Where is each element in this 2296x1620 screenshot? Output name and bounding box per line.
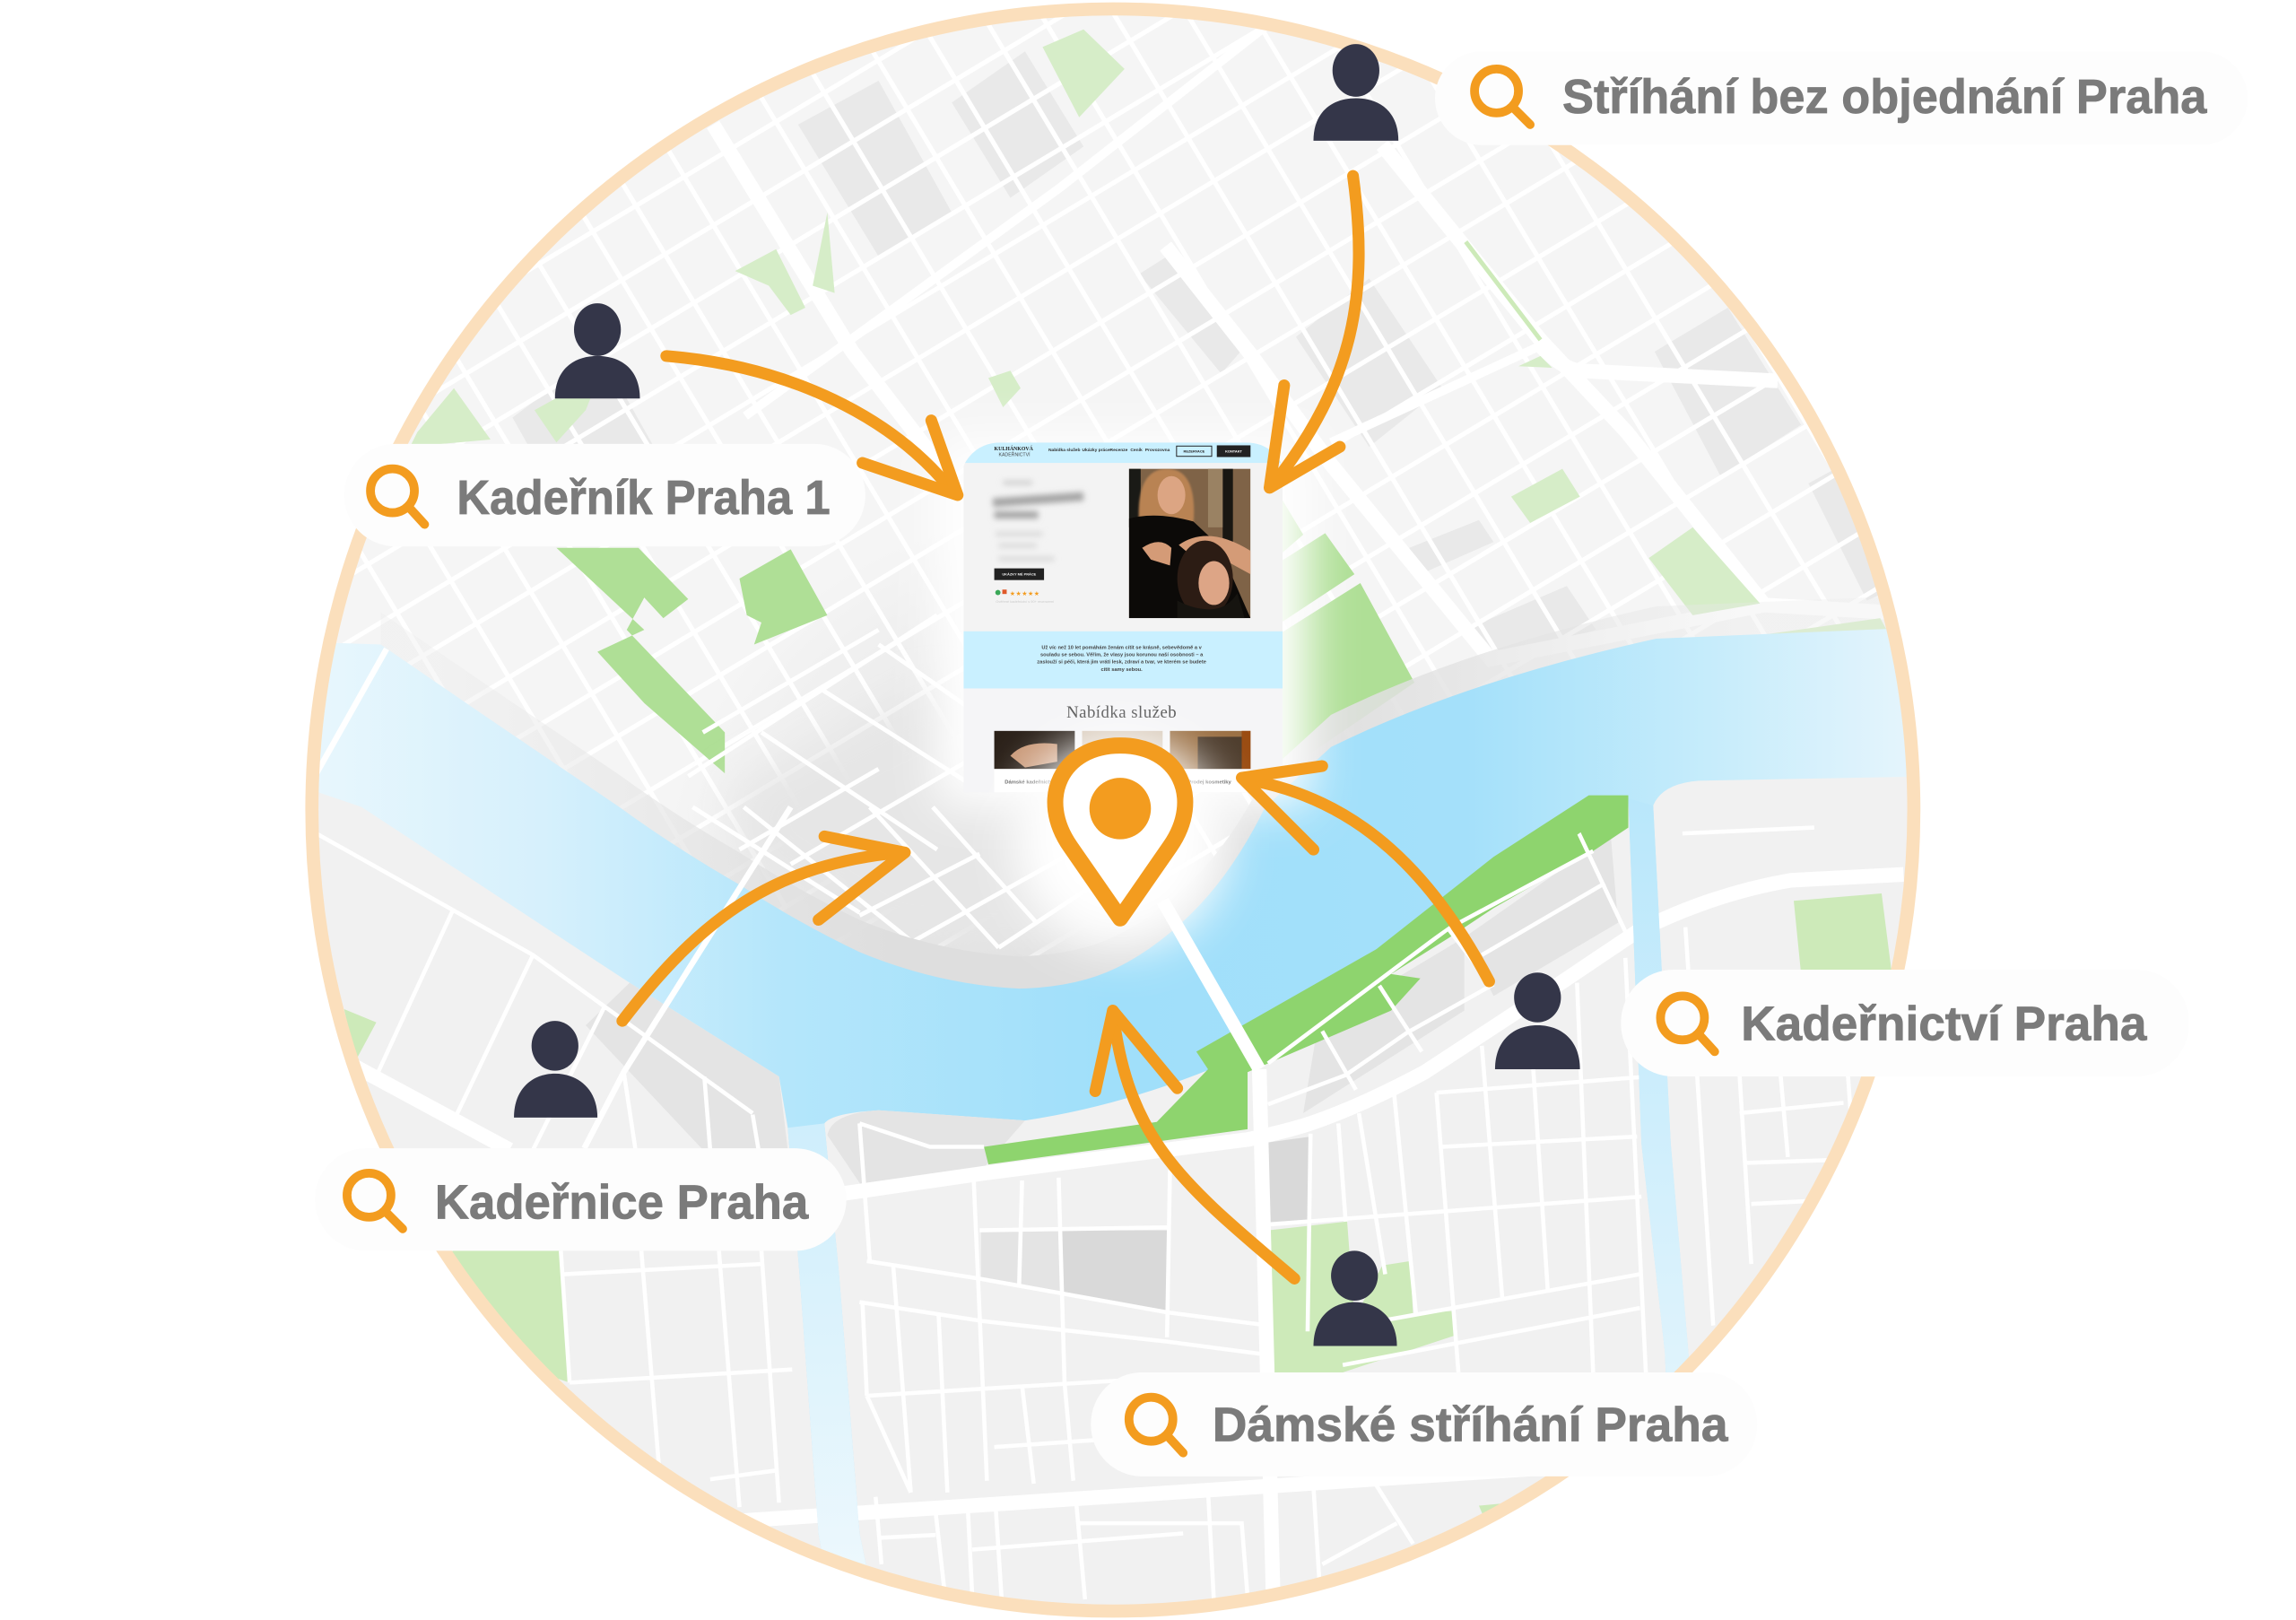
icon: magnifier <box>1129 1398 1183 1453</box>
services section: Dámské kadeřnictví <box>1004 780 1055 786</box>
search label: Stříhání bez objednání Praha <box>1435 51 2248 145</box>
intro band <box>963 631 1283 688</box>
icon: magnifier <box>1660 996 1715 1051</box>
circle ring <box>312 9 1914 1611</box>
intro band: Už víc než 10 let pomáhám ženám cítit se krásně, sebevědomě a v <box>1041 645 1203 650</box>
central peninsula <box>730 696 1083 956</box>
icon: location pin <box>1056 745 1185 919</box>
search label: Kadeřnictví Praha <box>1621 970 2189 1076</box>
river <box>293 627 1933 1620</box>
icon: user bottom-left <box>514 1021 597 1118</box>
website header <box>963 442 1283 463</box>
hero button: UKÁZKY MÉ PRÁCE <box>1002 571 1037 576</box>
rating stars <box>996 589 1054 604</box>
search label: Dámské stříhání Praha <box>1091 1372 1757 1476</box>
icon: user bottom <box>1313 1250 1397 1346</box>
white glow behind website <box>937 440 1309 806</box>
rating stars: Ověřené kadeřnictví s 90+ recenzemi <box>996 599 1054 604</box>
arrow: from bottom user <box>1095 1011 1294 1278</box>
services section <box>994 705 1250 792</box>
icon: user top <box>1313 44 1398 141</box>
website header: REZERVACE <box>1184 449 1205 453</box>
north street grid <box>343 16 1876 956</box>
central diamond streets <box>688 615 1094 947</box>
website header: KONTAKT <box>1225 449 1243 453</box>
arrow: from bottom-left user <box>622 836 905 1021</box>
search label: Kadeřník Praha 1: Kadeřník Praha 1 <box>457 471 831 525</box>
search label: Dámské stříhání Praha: Dámské stříhání Praha <box>1213 1398 1729 1452</box>
website header: Recenze <box>1110 448 1128 453</box>
parks north <box>410 30 1887 639</box>
grey city blocks north <box>512 51 1933 659</box>
icon: user right <box>1495 972 1580 1069</box>
intro band: cítit samy sebou. <box>1100 667 1143 673</box>
search label: Stříhání bez objednání Praha: Stříhání bez objednání Praha <box>1562 70 2207 124</box>
north main roads <box>713 125 1887 659</box>
shore band <box>474 603 1885 986</box>
south land <box>293 776 1933 1620</box>
services section: Prodej kosmetiky <box>1187 780 1232 786</box>
map content <box>319 16 1907 1599</box>
search label: Kadeřnictví Praha: Kadeřnictví Praha <box>1741 997 2147 1050</box>
hero photo <box>1129 469 1250 618</box>
search label: Kadeřnice Praha <box>315 1148 847 1250</box>
page body <box>963 463 1283 631</box>
thin green strip <box>1465 242 1541 340</box>
parks central <box>556 498 1414 773</box>
parks south <box>344 893 1892 1523</box>
hero button <box>995 569 1044 580</box>
website header: Nabídka služeb <box>1048 448 1080 453</box>
services section: Nabídka služeb <box>1066 703 1177 722</box>
website mockup <box>963 442 1283 794</box>
website header: Ukázky práce <box>1083 448 1110 453</box>
bridges <box>1162 901 1259 1069</box>
website header: KULHÁNKOVÁ <box>995 445 1034 452</box>
icon: magnifier <box>347 1173 403 1229</box>
intro band: souladu se sebou. Věřím, že vlasy jsou korunou naší osobnosti – a <box>1040 653 1204 658</box>
search label: Kadeřnice Praha: Kadeřnice Praha <box>435 1176 809 1230</box>
intro band: zaslouží si péči, která jim vrátí lesk, zdraví a tvar, ve kterém se budete <box>1037 660 1206 666</box>
arrow: from top-left user <box>666 356 958 495</box>
central dark shading <box>878 670 1239 956</box>
canals <box>787 798 1706 1620</box>
pin glow <box>1014 736 1226 947</box>
blurred headline <box>993 481 1083 561</box>
map base <box>313 11 1912 1609</box>
green riverside strip <box>984 796 1629 1164</box>
website header: KADEŘNICTVÍ <box>998 451 1031 458</box>
icon: magnifier <box>370 469 424 525</box>
icon: magnifier <box>1474 69 1530 125</box>
map circle <box>305 2 1921 1618</box>
arrow: from right user <box>1241 766 1489 981</box>
search label: Kadeřník Praha 1 <box>344 444 865 546</box>
website header: Provozovna <box>1145 448 1170 453</box>
south street grid <box>317 823 1933 1620</box>
icon: user top-left <box>555 303 639 398</box>
website header: Ceník <box>1130 448 1143 453</box>
arrow: from top user <box>1270 176 1359 488</box>
rating stars: ★★★★★ <box>1010 590 1039 597</box>
south shading and blocks <box>586 835 1618 1292</box>
